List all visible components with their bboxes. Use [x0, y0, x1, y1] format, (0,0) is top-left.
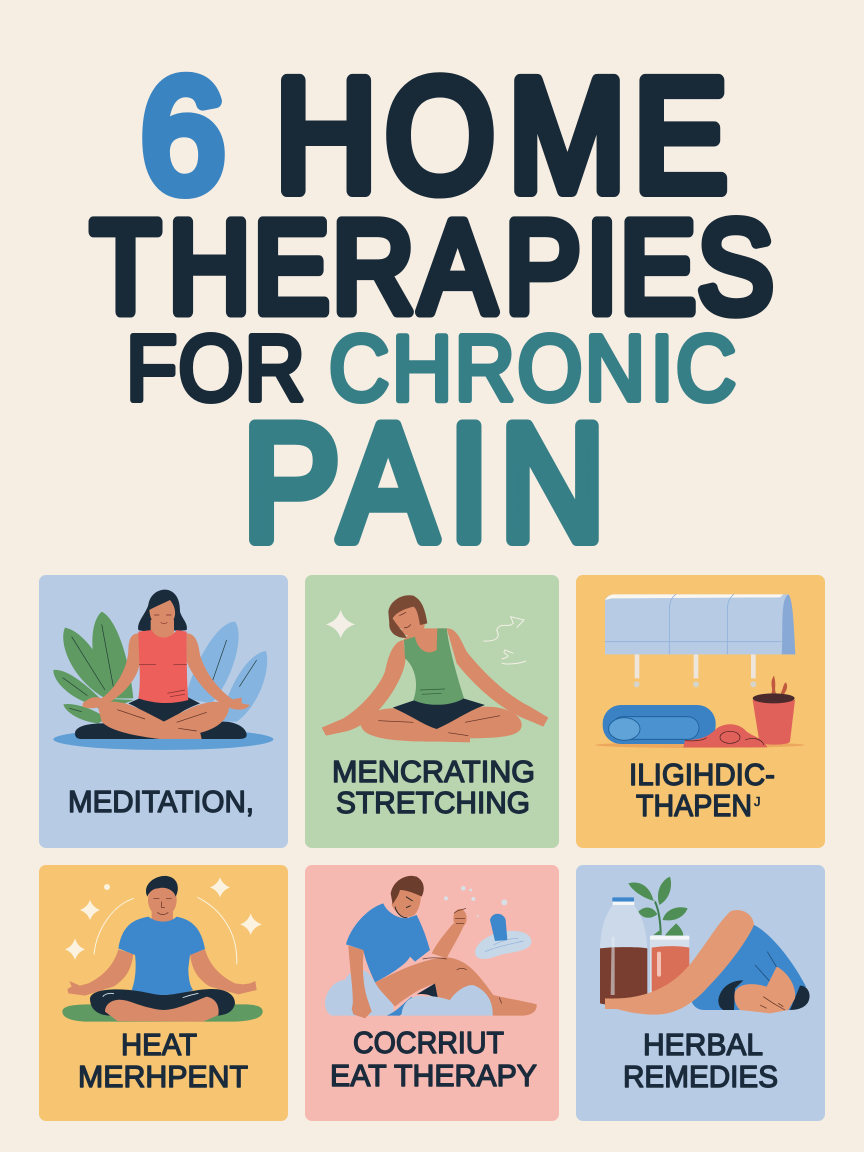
panel: eat therapy: [305, 865, 559, 1121]
label: HEAT MERHPENT: MERHPENT: [78, 1059, 248, 1094]
title: [91, 45, 773, 575]
label: ILIGIHDIC- THAPEN: THAPEN: [636, 788, 752, 823]
illustration: man meditating with sparkles: [62, 876, 263, 1022]
label: HEAT MERHPENT: HEAT: [121, 1027, 197, 1062]
illustration: woman stretching, seated: [322, 595, 548, 742]
illustration: man seated on cloud with cup: [325, 876, 537, 1018]
illustration: bottles, plant and person bending: [600, 877, 810, 1015]
illustration: woman meditating with leaves: [53, 590, 273, 750]
label: ILIGIHDIC- THAPEN: J: [754, 794, 760, 809]
title line: FOR CHRONIC: [126, 316, 736, 420]
title line: FOR CHRONIC: FOR: [126, 316, 305, 420]
label: HERBAL REMEDIES: HERBAL: [643, 1027, 763, 1062]
title line: 6 HOME: HOME: [275, 46, 728, 224]
panel: meditation: [39, 575, 288, 848]
label: HERBAL REMEDIES: [623, 1027, 778, 1094]
title line: PAIN: PAIN: [243, 390, 605, 575]
panel: herbal remedies: [576, 865, 825, 1121]
title line: 6 HOME: 6: [141, 45, 225, 225]
illustration: wall unit, blue pack, towel and hot cup: [595, 594, 805, 748]
panel: stretching: [305, 575, 559, 848]
label: MEDITATION,: MEDITATION,: [68, 784, 254, 819]
label: ILIGIHDIC- THAPEN: ILIGIHDIC-: [629, 757, 775, 792]
panel: cold and heat objects: [576, 575, 825, 848]
panel: heat: [39, 865, 288, 1121]
label: MENCRATING STRETCHING: [332, 754, 535, 820]
label: COCRRIUT EAT THERAPY: [330, 1025, 537, 1093]
label: ILIGIHDIC- THAPEN: [629, 757, 775, 823]
label: HERBAL REMEDIES: REMEDIES: [623, 1059, 778, 1094]
label: COCRRIUT EAT THERAPY: COCRRIUT: [353, 1025, 504, 1060]
label: COCRRIUT EAT THERAPY: EAT THERAPY: [330, 1058, 537, 1093]
label: MENCRATING STRETCHING: MENCRATING: [332, 754, 535, 789]
title line: THERAPIES: THERAPIES: [91, 195, 773, 341]
label: HEAT MERHPENT: [78, 1027, 248, 1094]
label: MENCRATING STRETCHING: STRETCHING: [336, 785, 530, 820]
title line: FOR CHRONIC: CHRONIC: [329, 316, 736, 420]
